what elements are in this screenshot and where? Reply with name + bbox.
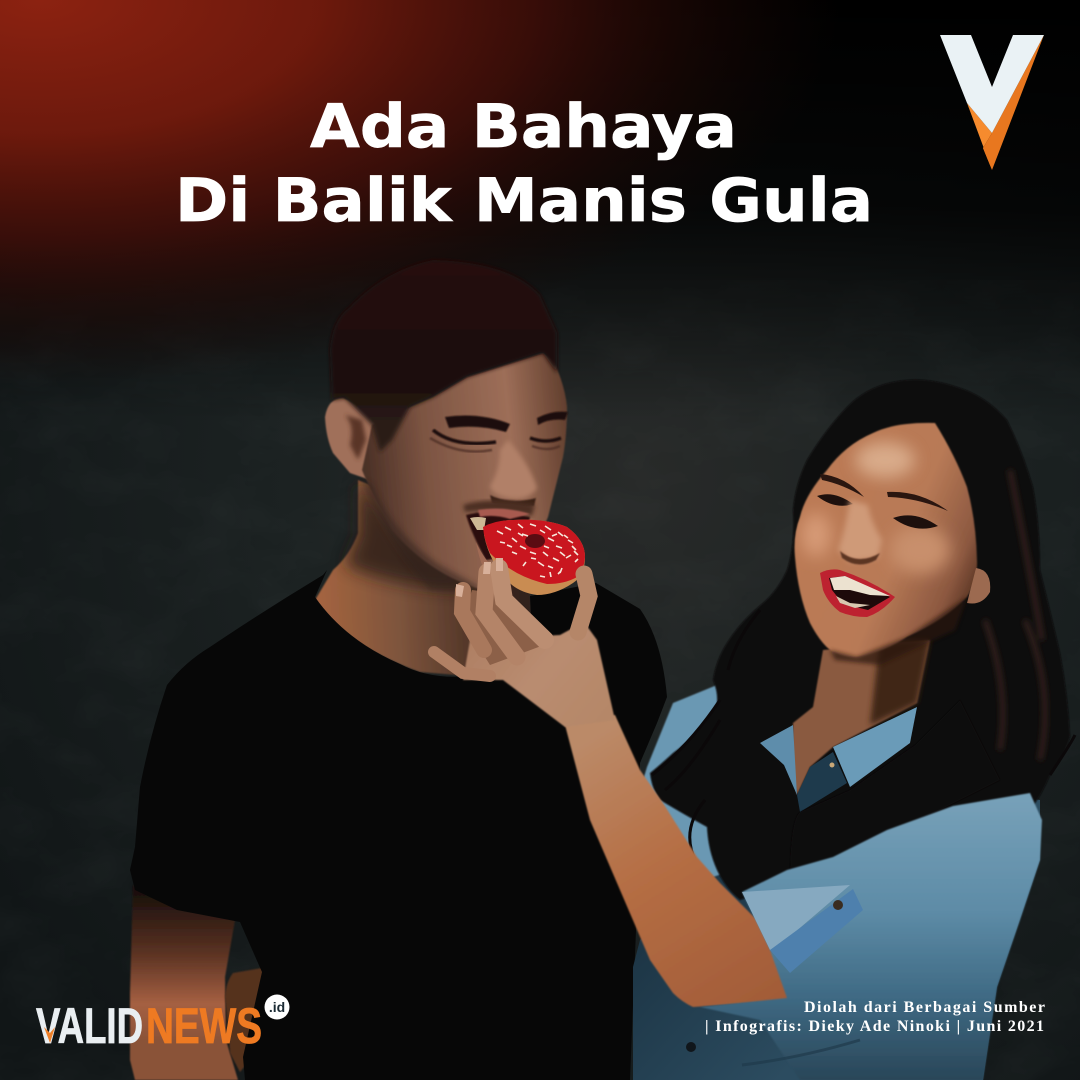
man's neck — [315, 480, 532, 676]
thumb — [578, 574, 589, 632]
woman's rolled cuff with button — [742, 885, 863, 973]
woman's ear — [967, 568, 990, 604]
source credit: Diolah dari Berbagai Sumber — [804, 999, 1045, 1016]
woman's button placket — [797, 752, 847, 812]
upper neck shadow — [345, 480, 480, 590]
woman's hair over chest — [790, 700, 1000, 885]
logo: VALIDNEWS.id: VALID — [36, 998, 143, 1054]
sprinkles — [497, 524, 578, 577]
finger base web — [462, 590, 552, 665]
logo: VALIDNEWS.id — [36, 994, 290, 1054]
donut base — [484, 520, 585, 595]
man's closed eyes — [433, 430, 561, 444]
woman's lower denim shirt — [633, 760, 1040, 1080]
woman's smiling mouth — [820, 569, 895, 617]
man's jaw shadow — [362, 480, 485, 590]
woman's hand palm — [434, 520, 615, 727]
woman's left collar — [760, 725, 797, 795]
man's black t-shirt — [130, 570, 667, 1080]
woman's eyes — [817, 494, 938, 529]
middle finger — [484, 572, 517, 657]
woman's hair — [650, 380, 1070, 900]
title: Di Balik Manis Gula — [175, 166, 873, 236]
woman's chin shadow — [830, 597, 967, 665]
ring finger — [462, 590, 484, 650]
donut drawn behind the fingers — [483, 520, 585, 595]
donut hole — [525, 534, 545, 548]
man's nose — [490, 440, 537, 498]
woman's denim sleeve — [700, 793, 1042, 1080]
woman's face — [795, 423, 977, 657]
brand mark: V logo — [940, 35, 1044, 170]
man's hair — [330, 260, 557, 452]
man's ear — [325, 398, 375, 480]
woman's right collar — [833, 707, 917, 787]
woman's nose — [838, 500, 882, 562]
title: Ada Bahaya — [310, 92, 737, 162]
woman's facial highlights — [801, 442, 950, 574]
woman's forearm — [565, 715, 800, 1007]
logo: VALIDNEWS.id: .id — [269, 999, 285, 1015]
man's hand at waist — [225, 968, 270, 1072]
man's mouth biting donut — [466, 512, 530, 560]
shirt chest pocket seam — [742, 1040, 860, 1065]
man's face — [362, 353, 567, 590]
man's moustache shadow — [463, 500, 535, 516]
woman's hair sheen — [985, 470, 1045, 760]
photo: woman — [565, 380, 1075, 1080]
man's forearm — [130, 885, 238, 1080]
woman's hair strands — [652, 610, 1075, 862]
index finger — [499, 568, 545, 640]
man's eyebrows — [445, 412, 568, 432]
shirt button — [686, 1042, 696, 1052]
finger nails — [456, 558, 503, 597]
logo: VALIDNEWS.id: NEWS — [146, 998, 262, 1054]
woman's shoulder denim — [640, 685, 780, 880]
pinky finger — [434, 652, 490, 676]
photo: man — [130, 260, 667, 1080]
woman's eyebrows — [820, 474, 948, 511]
title — [175, 92, 873, 236]
source credit — [705, 999, 1045, 1035]
donut glaze — [483, 520, 585, 584]
woman's neck — [793, 640, 930, 795]
source credit: | Infografis: Dieky Ade Ninoki | Juni 2021 — [705, 1018, 1044, 1035]
